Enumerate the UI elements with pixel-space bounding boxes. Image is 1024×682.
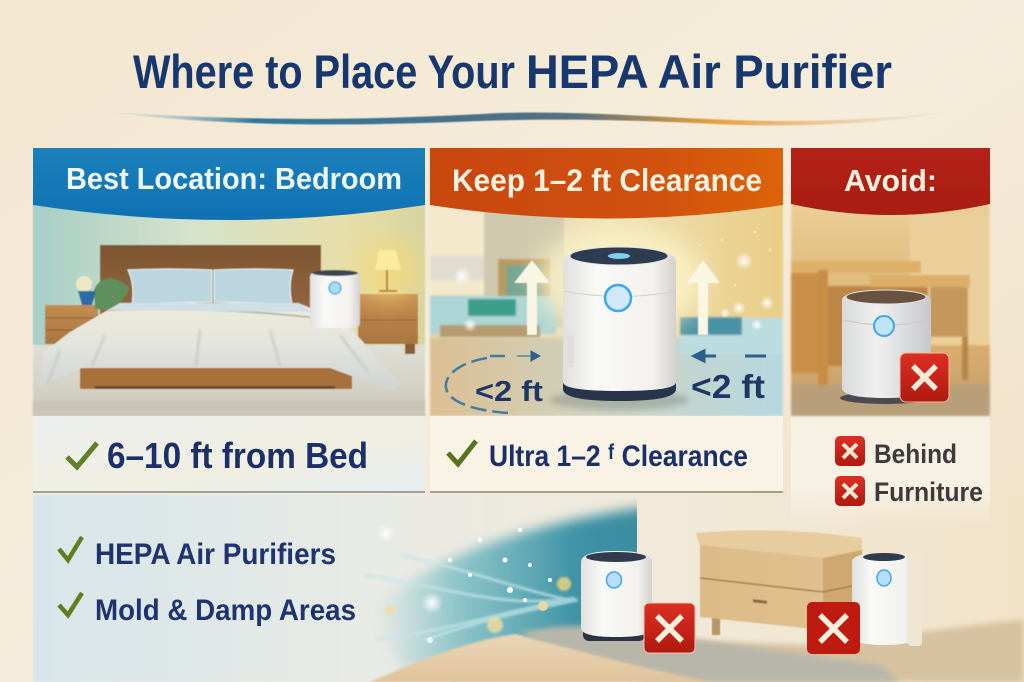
caption: 6-10 ft: 6–10 ft from Bed bbox=[107, 435, 368, 476]
header: avoid bbox=[791, 148, 990, 215]
air purifier bbox=[840, 290, 932, 404]
panel: bottom strip bbox=[33, 495, 1024, 682]
floor right bbox=[520, 620, 1024, 682]
arrow up left bbox=[514, 260, 550, 335]
check mold bbox=[59, 593, 82, 615]
particles bbox=[377, 524, 571, 643]
list: avoid items bbox=[835, 436, 983, 507]
check icon bbox=[448, 441, 476, 464]
air purifier large bbox=[549, 247, 689, 410]
air purifier bbox=[310, 270, 360, 328]
panel card bbox=[33, 148, 425, 493]
arrow up right bbox=[687, 260, 720, 335]
dresser bbox=[696, 530, 862, 635]
purifier left bbox=[581, 551, 652, 641]
label furniture: Furniture bbox=[874, 477, 983, 507]
label: left clearance: <2 ft bbox=[475, 376, 543, 408]
scene: bedroom bbox=[33, 190, 425, 416]
arrow right-side clearance bbox=[694, 351, 766, 361]
label mold: Mold & Damp Areas bbox=[95, 594, 356, 627]
bed frame bbox=[80, 368, 352, 389]
header: avoid: Avoid: bbox=[844, 163, 937, 198]
x badge bbox=[900, 353, 949, 402]
caption: ultra clearance bbox=[430, 416, 783, 493]
nightstand right bbox=[298, 287, 418, 354]
panel: clearance bbox=[430, 148, 783, 493]
strip background bbox=[33, 495, 1024, 682]
check icon bbox=[67, 443, 97, 467]
scene: avoid bbox=[791, 190, 990, 416]
nightstand left bbox=[45, 305, 98, 344]
lamp bbox=[358, 240, 418, 300]
check hepa bbox=[59, 537, 82, 560]
room backdrop bbox=[791, 190, 990, 416]
x icon behind bbox=[835, 436, 865, 466]
x icon furniture bbox=[835, 476, 865, 506]
room backdrop bbox=[430, 190, 783, 416]
teal air swirl bbox=[365, 505, 660, 670]
label behind: Behind bbox=[874, 439, 957, 469]
purifier right bbox=[852, 552, 922, 646]
air streams bbox=[365, 555, 578, 640]
label: right clearance: <2 ft bbox=[691, 368, 765, 405]
sparkles bbox=[453, 230, 774, 332]
panel: avoid bbox=[791, 148, 990, 530]
title: Where to Place Your bbox=[133, 45, 515, 98]
x badge right bbox=[807, 602, 860, 654]
floor grey wedge bbox=[522, 626, 900, 682]
title wave underline bbox=[100, 110, 960, 125]
title: HEPA Air Purifier bbox=[526, 45, 892, 98]
title bbox=[133, 45, 892, 98]
label hepa: HEPA Air Purifiers bbox=[95, 538, 336, 571]
plant bbox=[76, 276, 129, 310]
blanket bbox=[38, 303, 402, 391]
arrow left-side clearance bbox=[517, 351, 540, 361]
caption: 6-10 ft bbox=[33, 416, 425, 493]
list: good items bbox=[59, 537, 356, 627]
floor sand bbox=[370, 634, 710, 682]
panel: bedroom bbox=[33, 148, 425, 493]
header: bedroom: Best Location: Bedroom bbox=[66, 162, 402, 196]
scene: clearance bbox=[430, 190, 783, 416]
dashed arc left bbox=[446, 356, 508, 413]
caption: ultra clearance: Ultra 1–2 ᶠ Clearance bbox=[489, 440, 748, 473]
pillows bbox=[128, 269, 293, 304]
header: bedroom bbox=[33, 148, 425, 220]
panel card bbox=[430, 148, 783, 493]
panel card bbox=[791, 148, 990, 530]
headboard bbox=[100, 245, 321, 315]
header: clearance bbox=[430, 148, 783, 218]
teal cloud bbox=[375, 505, 660, 670]
header: clearance: Keep 1–2 ft Clearance bbox=[452, 162, 762, 198]
x badge left bbox=[644, 603, 695, 653]
